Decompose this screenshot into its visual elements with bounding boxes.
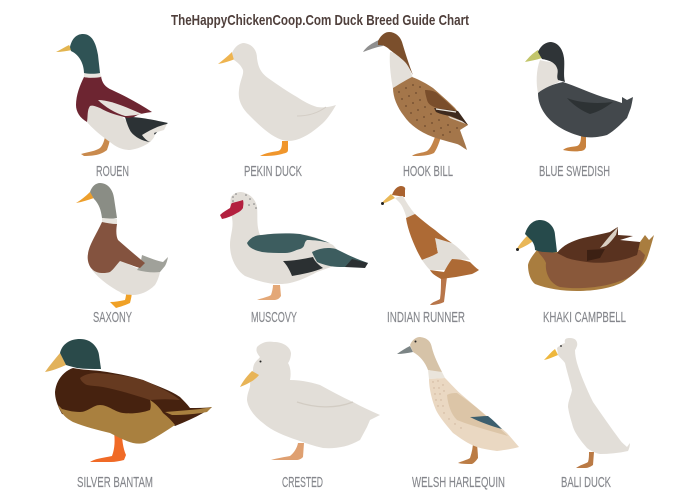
duck: Saxony: [76, 183, 168, 308]
duck: Khaki Campbell: [516, 220, 654, 291]
label: Indian Runner: INDIAN RUNNER: [387, 309, 465, 326]
duck: Crested: [240, 342, 380, 460]
label: Hook Bill: HOOK BILL: [403, 163, 453, 180]
title: TheHappyChickenCoop.Com Duck Breed Guide Chart: [171, 12, 469, 29]
duck: Indian Runner: [381, 186, 479, 305]
label: Welsh Harlequin: WELSH HARLEQUIN: [412, 474, 505, 491]
label: Pekin Duck: PEKIN DUCK: [244, 163, 302, 180]
duck: Blue Swedish: [525, 42, 633, 151]
label: Crested: CRESTED: [282, 474, 323, 491]
label: Bali Duck: BALI DUCK: [561, 474, 611, 491]
duck: Bali: [544, 338, 630, 468]
duck: Hook Bill: [363, 32, 468, 156]
label: Blue Swedish: BLUE SWEDISH: [539, 163, 610, 180]
label: Muscovy: MUSCOVY: [251, 309, 297, 326]
label: Rouen: ROUEN: [96, 163, 129, 180]
label: Silver Bantam: SILVER BANTAM: [77, 474, 153, 491]
duck: Muscovy: [220, 192, 368, 300]
duck: Welsh Harlequin: [397, 337, 519, 464]
label: Khaki Campbell: KHAKI CAMPBELL: [543, 309, 626, 326]
duck: Silver Bantam: [45, 339, 212, 462]
duck: Pekin: [218, 43, 336, 156]
label: Saxony: SAXONY: [93, 309, 132, 326]
duck: Rouen: [56, 34, 168, 156]
